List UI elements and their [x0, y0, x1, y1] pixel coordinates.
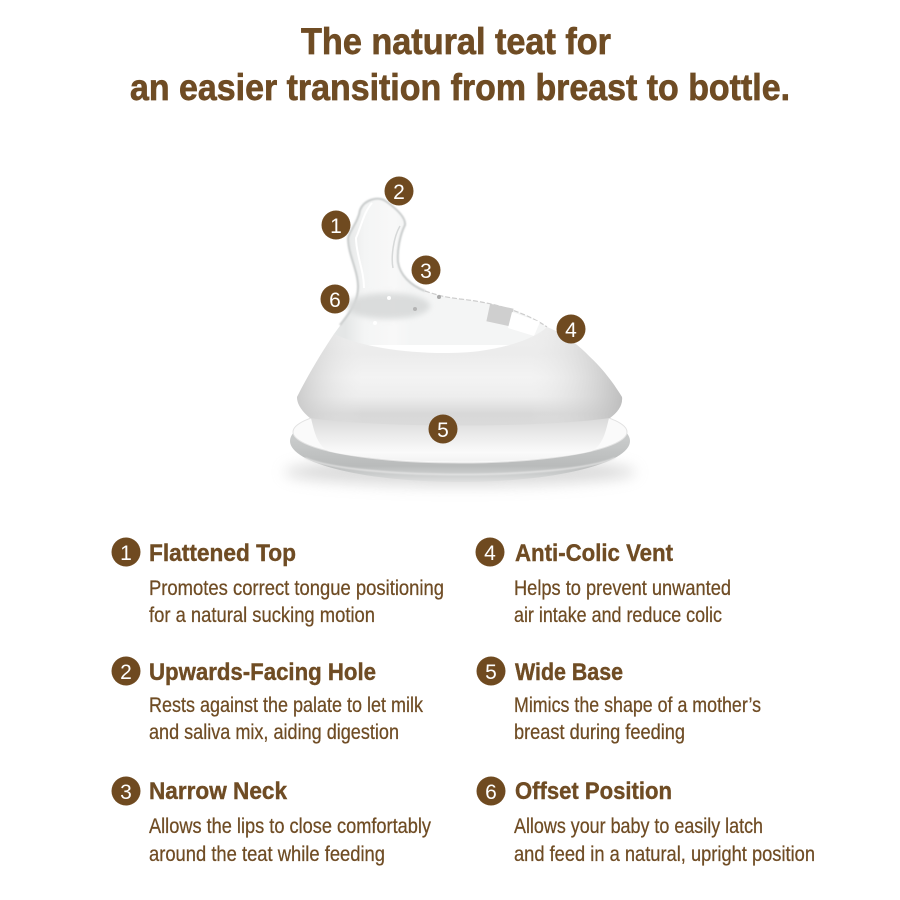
feature: Flattened Top: 1 [120, 542, 132, 565]
lower dome [297, 327, 622, 426]
feature: Flattened Top [112, 538, 444, 627]
feature: Wide Base: Wide Base [515, 659, 623, 686]
feature: Narrow Neck: around the teat while feeding [149, 843, 385, 866]
marker 5 [428, 414, 458, 444]
areola dots [437, 295, 441, 299]
feature: Flattened Top: Promotes correct tongue positioning [149, 577, 444, 600]
base disc rim [290, 400, 630, 482]
top rim highlight [425, 291, 547, 327]
feature: Flattened Top: Flattened Top [149, 540, 296, 567]
feature: Narrow Neck: 3 [120, 781, 132, 804]
marker 3: 3 [420, 260, 432, 283]
feature: Offset Position: Allows your baby to easily latch [514, 815, 763, 838]
feature: Offset Position: 6 [485, 781, 497, 804]
marker 2 [384, 176, 414, 206]
neck [310, 414, 610, 462]
anti-colic vent [486, 304, 540, 336]
marker 6: 6 [329, 289, 341, 312]
title: The natural teat for [301, 21, 611, 62]
marker 4: 4 [565, 319, 577, 342]
feature: Narrow Neck: Narrow Neck [149, 778, 288, 805]
marker 3 [412, 256, 440, 284]
feature: Offset Position [476, 776, 815, 866]
feature: Wide Base: breast during feeding [514, 721, 685, 744]
feature: Offset Position: and feed in a natural, upright position [514, 843, 815, 866]
feature: Upwards-Facing Hole: and saliva mix, aiding digestion [149, 721, 399, 744]
stem outline [340, 199, 425, 325]
feature: Anti-Colic Vent: Anti-Colic Vent [515, 540, 673, 567]
areola shading [346, 293, 430, 319]
feature: Wide Base [476, 656, 761, 744]
feature: Upwards-Facing Hole [112, 656, 423, 744]
marker 1: 1 [330, 215, 342, 238]
title: an easier transition from breast to bottle. [130, 67, 790, 108]
teat illustration [284, 199, 636, 486]
feature: Wide Base: 5 [485, 661, 497, 684]
feature: Wide Base: Mimics the shape of a mother’s [514, 694, 761, 717]
marker 6 [320, 284, 350, 314]
base disc top [293, 401, 627, 463]
title [130, 21, 790, 108]
feature: Offset Position: Offset Position [515, 778, 672, 805]
feature: Anti-Colic Vent: Helps to prevent unwanted [514, 577, 731, 600]
feature: Anti-Colic Vent: air intake and reduce colic [514, 604, 722, 627]
marker 2: 2 [393, 181, 405, 204]
marker 4 [556, 314, 586, 344]
feature: Anti-Colic Vent [476, 538, 731, 627]
feature: Narrow Neck [112, 776, 431, 866]
feature: Upwards-Facing Hole: 2 [120, 661, 132, 684]
feature: Upwards-Facing Hole: Upwards-Facing Hole [149, 659, 376, 686]
marker 5: 5 [437, 419, 449, 442]
teat upper body and stem [334, 199, 547, 345]
feature: Upwards-Facing Hole: Rests against the palate to let milk [149, 694, 423, 717]
feature: Anti-Colic Vent: 4 [484, 542, 496, 565]
base shadow [284, 458, 636, 486]
marker 1 [322, 210, 350, 240]
feature: Flattened Top: for a natural sucking motion [149, 604, 375, 627]
feature: Narrow Neck: Allows the lips to close comfortably [149, 815, 431, 838]
